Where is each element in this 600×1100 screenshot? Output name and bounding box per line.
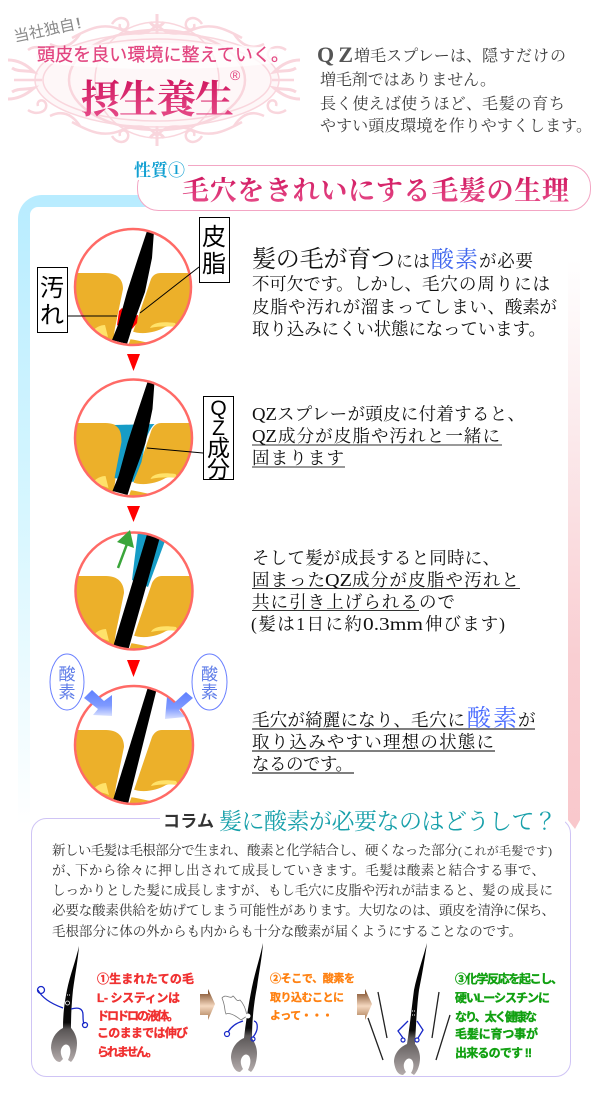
label: dirt: れ: [40, 302, 64, 329]
caption: step 1: られません。: [97, 1045, 158, 1059]
label: sebum: [200, 218, 230, 282]
arrow: green upward: [117, 530, 134, 568]
text block: step 1: には: [396, 252, 430, 271]
diagram 3: ingredient lifted with the hair: [69, 531, 199, 653]
caption: step 1: このままでは伸び: [97, 1025, 188, 1040]
intro text: 増毛スプレーは、: [354, 47, 482, 65]
label: oxygen left: 素: [58, 683, 76, 702]
column body text: 、: [66, 863, 80, 878]
label: oxygen right: [192, 654, 227, 710]
label: QZ ingredient: [204, 396, 234, 482]
label: sebum: 脂: [202, 251, 226, 278]
catch phrase: 当社独自: 当社独自: [12, 15, 76, 46]
callout line: sebum: [140, 267, 199, 313]
label: dirt: 汚: [40, 275, 64, 302]
column body text: 必要な酸素供給を妨げてしまう可能性があります。大切なのは、: [52, 902, 439, 918]
text block: step 3: 固まった: [252, 570, 325, 590]
text halo behind the emblem heading: [25, 43, 295, 69]
arrow: step 2 to 3: [127, 506, 140, 522]
caption: step 2: よって・・・: [270, 1009, 333, 1022]
illustration: hair character 1: [38, 946, 88, 1062]
brand name: 摂生養生: [81, 79, 234, 122]
caption: step 1: ①生まれたての毛: [97, 971, 194, 986]
label: oxygen left: 酸: [58, 665, 76, 684]
callout line: QZ ingredient: [147, 448, 203, 453]
intro text: 隠すだけの: [482, 47, 566, 65]
text block: step 1: 髪の毛が育つ: [252, 246, 395, 273]
catch phrase: 当社独自: !: [74, 15, 83, 33]
column body text: 頭皮を清浄に保ち、: [439, 902, 555, 918]
text block: step 1: [252, 246, 557, 339]
intro text: 長く使えば使うほど、: [320, 95, 482, 113]
arrow: brown 2: [357, 989, 372, 1020]
caption: step 1: L- システィンは: [97, 991, 180, 1005]
panel: column: [32, 818, 570, 1076]
caption: step 2: [270, 971, 355, 1022]
caption: step 1: [97, 971, 194, 1059]
text block: step 3: 0.3mm: [363, 614, 423, 634]
text block: step 1: が必要: [479, 251, 534, 271]
column body text: 硬くなった部分: [365, 842, 458, 858]
intro text: [317, 42, 592, 135]
text block: step 3: 伸びます): [425, 614, 505, 634]
caption: step 3: [455, 971, 563, 1060]
label: sebum: 皮: [202, 224, 226, 251]
text block: step 2: QZ: [252, 426, 277, 446]
brand name: ®: [230, 67, 241, 83]
illustration: hair character 2: [222, 943, 263, 1072]
caption: step 2: 取り込むことに: [270, 991, 344, 1004]
text block: step 4: 毛穴に: [411, 710, 465, 730]
text block: step 3: [251, 548, 520, 634]
column body text: もし毛穴に皮脂や汚れが詰まると、: [268, 882, 482, 898]
text block: step 1: 酸素: [431, 247, 478, 272]
illustration: hair character 3: [394, 943, 427, 1075]
ornament: pink lace emblem: [8, 14, 300, 146]
text block: step 2: スプレーが頭皮に付着すると、: [277, 404, 525, 424]
column heading: 髪に酸素が必要なのはどうして？: [219, 809, 557, 834]
diagram 1: pore with sebum and dirt: [74, 228, 192, 346]
column body text: が: [52, 863, 66, 878]
text block: step 2: 固まります: [252, 448, 344, 468]
intro text: 増毛剤ではありません。: [320, 70, 496, 89]
panel: blue frame band: [18, 195, 160, 825]
caption: step 3: 毛髪に育つ事が: [455, 1026, 538, 1041]
text block: step 2: QZ: [252, 404, 277, 424]
text block: step 3: 共に引き上げられるので: [252, 592, 455, 612]
caption: step 2: ②そこで、酸素を: [270, 971, 355, 985]
arrow: oxygen from left: [84, 690, 112, 716]
intro text: 毛髪の育ち: [482, 95, 565, 113]
label: QZ ingredient: Q: [210, 397, 227, 420]
text block: step 1: 酸素が: [505, 297, 557, 317]
panel: pink frame band: [568, 260, 580, 829]
intro text: QZ: [317, 42, 353, 67]
column body text: 新しい毛髪は毛根部分で生まれ、: [52, 842, 247, 858]
label: QZ ingredient: 分: [207, 456, 230, 482]
caption: step 3: 出来るのです !!: [455, 1045, 532, 1060]
label: oxygen left: [50, 654, 84, 710]
label: oxygen right: 酸: [201, 665, 218, 684]
callout line: dirt: [67, 315, 117, 317]
text block: step 3: 成分が皮脂や汚れと: [352, 570, 519, 590]
column body text: 酸素と化学結合し、: [247, 843, 365, 858]
column body text: 毛根部分に体の外からも内からも十分な酸素が届くようにすることなのです。: [52, 923, 522, 939]
text block: step 1: 不可欠です。しかし、: [252, 274, 422, 294]
text block: step 1: 皮脂や汚れが溜まってしまい、: [252, 297, 505, 317]
caption: step 3: 硬いLーシスチンに: [455, 991, 550, 1005]
diagram 2: QZ ingredient in pore: [68, 378, 198, 500]
text block: step 1: 毛穴の周りには: [422, 274, 550, 294]
diagram 4: clean pore: [69, 683, 199, 807]
text block: step 3: (髪は1日に約: [251, 614, 362, 634]
text block: step 4: 取り込みやすい理想の状態に: [252, 732, 494, 752]
label: oxygen right: 素: [201, 683, 218, 702]
caption: step 3: ③化学反応を起こし、: [455, 971, 563, 986]
label: QZ ingredient: 成: [207, 435, 230, 461]
label: dirt: [38, 268, 68, 332]
text block: step 1: 取り込みにくい状態になっています。: [252, 319, 546, 339]
column heading: コラム: [163, 812, 214, 831]
caption: step 1: ドロドロの液体。: [97, 1008, 179, 1023]
column body text: しっかりとした髪に成長しますが、: [52, 882, 268, 898]
text block: step 2: 成分が皮脂や汚れと一緒に: [278, 426, 500, 446]
arrow: oxygen from right: [165, 692, 193, 719]
column body text: 下から徐々に押し出されて成長していきます。毛髪は酸素と結合する事で、: [75, 862, 545, 878]
caption: step 3: なり、太く健康な: [455, 1009, 537, 1024]
text block: step 3: そして髪が成長すると同時に、: [252, 548, 500, 568]
column body text: 髪の成長に: [482, 882, 553, 898]
label: QZ ingredient: Z: [212, 417, 225, 440]
text block: step 4: 毛穴が綺麗になり、: [252, 710, 411, 730]
text block: step 4: が: [518, 710, 536, 730]
arrow: brown 1: [200, 989, 215, 1020]
intro text: やすい頭皮環境を作りやすくします。: [320, 117, 592, 135]
text block: step 3: QZ: [325, 570, 352, 590]
column body text: [52, 842, 555, 939]
text block: step 4: なるのです。: [252, 754, 353, 774]
text block: step 4: [252, 705, 536, 774]
column body text: (これが毛髪です): [458, 844, 552, 858]
section heading: 毛穴をきれいにする毛髪の生理: [182, 176, 569, 206]
text block: step 2: [252, 404, 525, 468]
arrow: step 3 to 4: [127, 660, 140, 677]
motion lines around character 3: [368, 992, 450, 1060]
section heading: [132, 160, 590, 210]
subtitle: 頭皮を良い環境に整えていく。: [37, 45, 289, 65]
section heading: 性質①: [134, 161, 185, 180]
arrow: step 1 to 2: [127, 354, 140, 371]
text block: step 4: 酸素: [467, 705, 517, 732]
